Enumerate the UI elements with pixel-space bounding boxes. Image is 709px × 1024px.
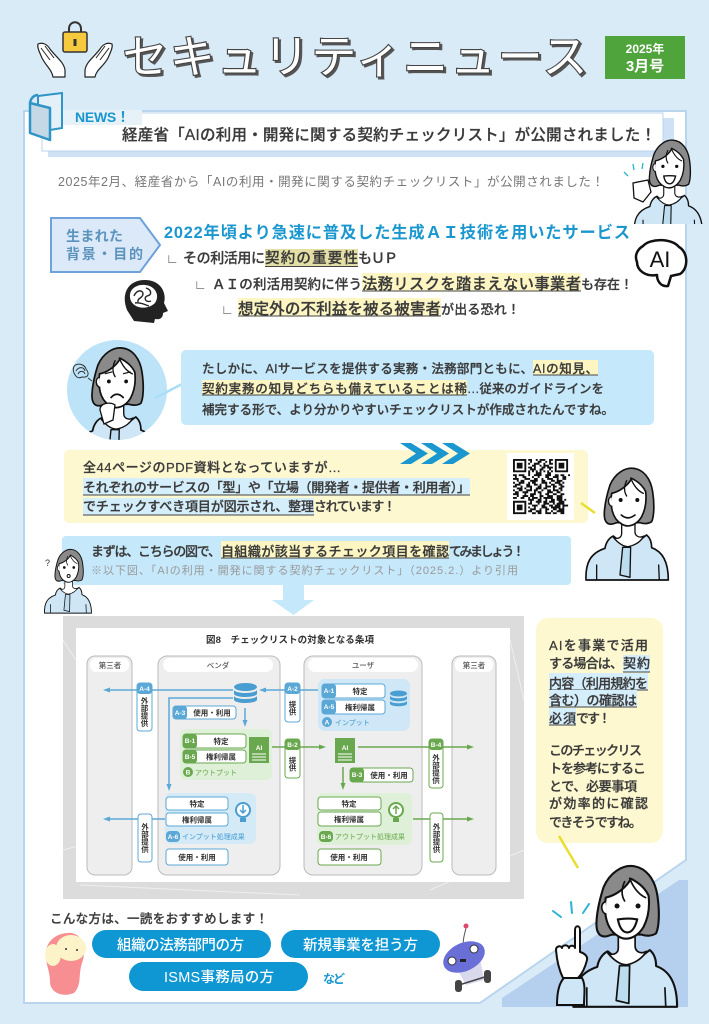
output panel vendor: 特定 [214, 736, 229, 746]
output panel vendor: 権利帰属 [206, 752, 236, 762]
callout: right yellow advice: このチェックリス [549, 743, 642, 758]
callout tail: yellow line [559, 836, 578, 868]
external provision box user: 外部提供 [432, 822, 441, 854]
callout: blue explanation: 契約実務の知見どちらも備えていることは稀 [202, 381, 467, 396]
output panel vendor: AI [256, 745, 262, 752]
text block: hierarchy list: ∟ [194, 277, 207, 292]
input panel user: 特定 [352, 686, 368, 696]
B-3 use: 使用・利用 [370, 770, 408, 780]
blue flow arrows [103, 688, 318, 822]
pill: new business [281, 930, 440, 958]
callout: right yellow advice: 含む）の確認は [549, 693, 637, 708]
input panel user: A-1 [324, 688, 335, 695]
vendor column: ベンダ [207, 660, 230, 670]
issue badge: 3月号 [626, 58, 664, 75]
use box vendor [166, 849, 228, 865]
output panel vendor: B [186, 770, 191, 776]
callout: blue explanation: 補完する形で、より分かりやすいチェックリストが作成されたんですね。 [202, 402, 614, 417]
input result panel vendor: 権利帰属 [182, 814, 212, 824]
output result panel user [317, 793, 412, 845]
callout: yellow PDF note: 全44ページのPDF資料となっていますが… [83, 460, 341, 475]
circle: worried woman [67, 340, 167, 440]
text: recommendation heading: こんな方は、一読をおすすめします！ [50, 911, 268, 926]
A-4 external provision: 外部提供 [140, 696, 149, 728]
AI document user [335, 738, 355, 763]
callout: right yellow advice: トを参考にするこ [549, 761, 646, 776]
title: セキュリティニュース [122, 31, 588, 83]
use box vendor: 使用・利用 [178, 852, 216, 862]
output panel vendor [180, 729, 272, 780]
news tab [62, 109, 142, 125]
external provision box vendor: 外部提供 [140, 822, 150, 854]
news headline: 経産省「AIの利用・開発に関する契約チェックリスト」が公開されました！ [122, 125, 656, 144]
text block: hierarchy list: もＵＰ [358, 250, 398, 266]
database icon vendor [234, 683, 257, 703]
input panel user: A-5 [324, 704, 335, 711]
user column: ユーザ [352, 661, 375, 670]
text block: hierarchy list: が出る恐れ！ [441, 302, 520, 317]
green flow arrows [272, 744, 474, 822]
text block: hierarchy list: ＡＩの利活用契約に伴う [212, 277, 362, 292]
woman: right smiling [586, 468, 668, 580]
arrow: down to figure [272, 585, 314, 615]
A-4 external provision: A-4 [139, 686, 150, 693]
input panel user [318, 679, 410, 731]
speech bubble tail [155, 381, 188, 398]
B-4 external provision [429, 739, 443, 788]
icon: chevrons [400, 443, 470, 464]
issue badge: 2025年 [626, 41, 664, 56]
callout: blue explanation: AIの知見、 [533, 361, 598, 376]
QR code [507, 453, 574, 520]
text block: hierarchy list: 想定外の不利益を被る被害者 [238, 300, 441, 318]
text block: hierarchy list: ∟ [221, 302, 234, 317]
pentagon label: background and purpose [51, 218, 160, 272]
callout: right yellow advice: できそうですね。 [549, 815, 642, 830]
left third party column [87, 656, 132, 875]
pill: legal department: 組織の法務部門の方 [117, 937, 244, 954]
left third party column: 第三者 [99, 660, 122, 670]
callout: right yellow advice: 契約 [623, 656, 650, 671]
callout: right yellow advice: 内容（利用規約を [549, 676, 648, 691]
output result panel user: アウトプット処理成果 [335, 832, 405, 841]
callout: right yellow advice [536, 618, 663, 843]
input result panel vendor [165, 793, 256, 844]
news tab: NEWS！ [75, 109, 130, 125]
icon: AI cloud: AI [650, 247, 670, 272]
callout: blue instruction: まずは、こちらの図で、 [91, 544, 221, 559]
callout: right yellow advice: です！ [576, 711, 611, 726]
A-2 provision: A-2 [287, 686, 298, 693]
B-4 external provision: B-4 [431, 742, 442, 749]
callout: right yellow advice: が効率的に確認 [549, 796, 648, 811]
icon: pink character [45, 933, 86, 995]
callout: yellow PDF note: でチェックすべき項目が図示され、整理 [83, 499, 314, 514]
AI document user: AI [342, 745, 348, 752]
output panel vendor: アウトプット [195, 769, 237, 777]
icon: robot [438, 924, 491, 992]
woman: small questioning [44, 549, 91, 613]
external provision box user [430, 813, 443, 862]
pill: legal department [92, 930, 271, 958]
right third party column [452, 656, 496, 875]
issue badge [605, 36, 685, 79]
A-3 use: A-3 [175, 710, 186, 717]
B-3 use: B-3 [352, 772, 363, 779]
input panel user: A [325, 720, 330, 726]
callout: yellow PDF note: それぞれのサービスの「型」や「立場（開発者・提供者・利用者）」 [83, 480, 470, 495]
icon: lock and hands [38, 22, 112, 77]
right third party column: 第三者 [463, 660, 486, 670]
input panel user: インプット [335, 719, 370, 727]
text block: hierarchy list: その利活用に [183, 250, 265, 266]
panel: bottom right blue triangle [502, 880, 688, 1007]
pentagon label: background and purpose: 背景・目的 [66, 246, 143, 262]
vendor column [158, 656, 280, 875]
woman: small questioning: ? [45, 558, 50, 568]
output result panel user: 権利帰属 [334, 814, 364, 824]
news band shadow [48, 118, 674, 157]
intro line: 2025年2月、経産省から「AIの利用・開発に関する契約チェックリスト」が公開されました！ [58, 174, 604, 189]
output panel vendor: B-5 [185, 754, 196, 761]
callout: right yellow advice: する場合は、 [549, 656, 623, 671]
callout: blue explanation: …従来のガイドラインを [467, 381, 604, 396]
B-4 external provision: 外部提供 [431, 753, 440, 785]
text block: hierarchy list [166, 249, 633, 318]
text block: hierarchy list: 契約の重要性 [265, 250, 358, 267]
icon: book [30, 93, 62, 140]
news band [42, 113, 663, 151]
icon: AI cloud [636, 240, 686, 286]
B-2 provision: 提供 [288, 755, 297, 773]
A-2 provision [285, 683, 300, 722]
input result panel vendor: インプット処理成果 [182, 832, 245, 841]
output result panel user: B-6 [321, 834, 332, 841]
pill: ISMS office: ISMS事務局の方 [164, 969, 274, 986]
A-3 use: 使用・利用 [193, 708, 231, 718]
callout: blue explanation: たしかに、AIサービスを提供する実務・法務部門ともに、 [202, 361, 533, 376]
output result panel user: 特定 [342, 798, 357, 808]
A-4 external provision [137, 683, 152, 731]
figure: checklist diagram: 図8 チェックリストの対象となる条項 [206, 634, 374, 646]
callout: right yellow advice: 必須 [549, 711, 576, 726]
callout: blue explanation [181, 350, 654, 425]
pill: new business: 新規事業を担う方 [303, 937, 418, 954]
callout: blue instruction: てみましょう！ [449, 544, 525, 559]
pill: ISMS office [129, 962, 308, 991]
external provision box vendor [138, 814, 152, 862]
callout: blue instruction: 自組織が該当するチェック項目を確認 [221, 544, 449, 559]
text: etc: など [323, 971, 345, 986]
B-2 provision [285, 739, 300, 778]
icon: brain head [125, 280, 168, 323]
callout: blue instruction [62, 536, 571, 585]
A-2 provision: 提供 [288, 699, 297, 717]
text block: hierarchy list: も存在！ [581, 277, 633, 292]
callout: right yellow advice: AIを事業で活用 [549, 638, 648, 653]
callout: right yellow advice: とで、必要事項 [549, 779, 637, 794]
B-3 use [350, 768, 413, 782]
callout: yellow PDF note: されています！ [314, 499, 396, 514]
input result panel vendor: 特定 [190, 798, 205, 808]
text block: hierarchy list: 法務リスクを踏まえない事業者 [362, 276, 581, 293]
woman: bottom right pointing [553, 866, 677, 1007]
A-3 use [173, 706, 236, 719]
woman: top right cheering [624, 140, 702, 233]
output panel vendor: B-1 [185, 738, 196, 745]
input result panel vendor: A-6 [168, 834, 179, 841]
B-2 provision: B-2 [287, 742, 298, 749]
figure: checklist diagram [63, 616, 524, 899]
pentagon label: background and purpose: 生まれた [66, 228, 123, 244]
callout: yellow PDF note [64, 450, 588, 523]
callout: blue instruction: ※以下図、「AIの利用・開発に関する契約チェックリスト」（2025.2.）より引用 [91, 563, 518, 577]
use box user [318, 849, 381, 865]
callout tail: yellow tick [581, 503, 595, 513]
heading: generative AI service: 2022年頃より急速に普及した生成ＡＩ技術を用いたサービス [164, 223, 630, 242]
use box user: 使用・利用 [330, 852, 368, 862]
input panel user: 権利帰属 [345, 702, 375, 712]
user column [304, 656, 422, 875]
text block: hierarchy list: ∟ [166, 251, 179, 266]
